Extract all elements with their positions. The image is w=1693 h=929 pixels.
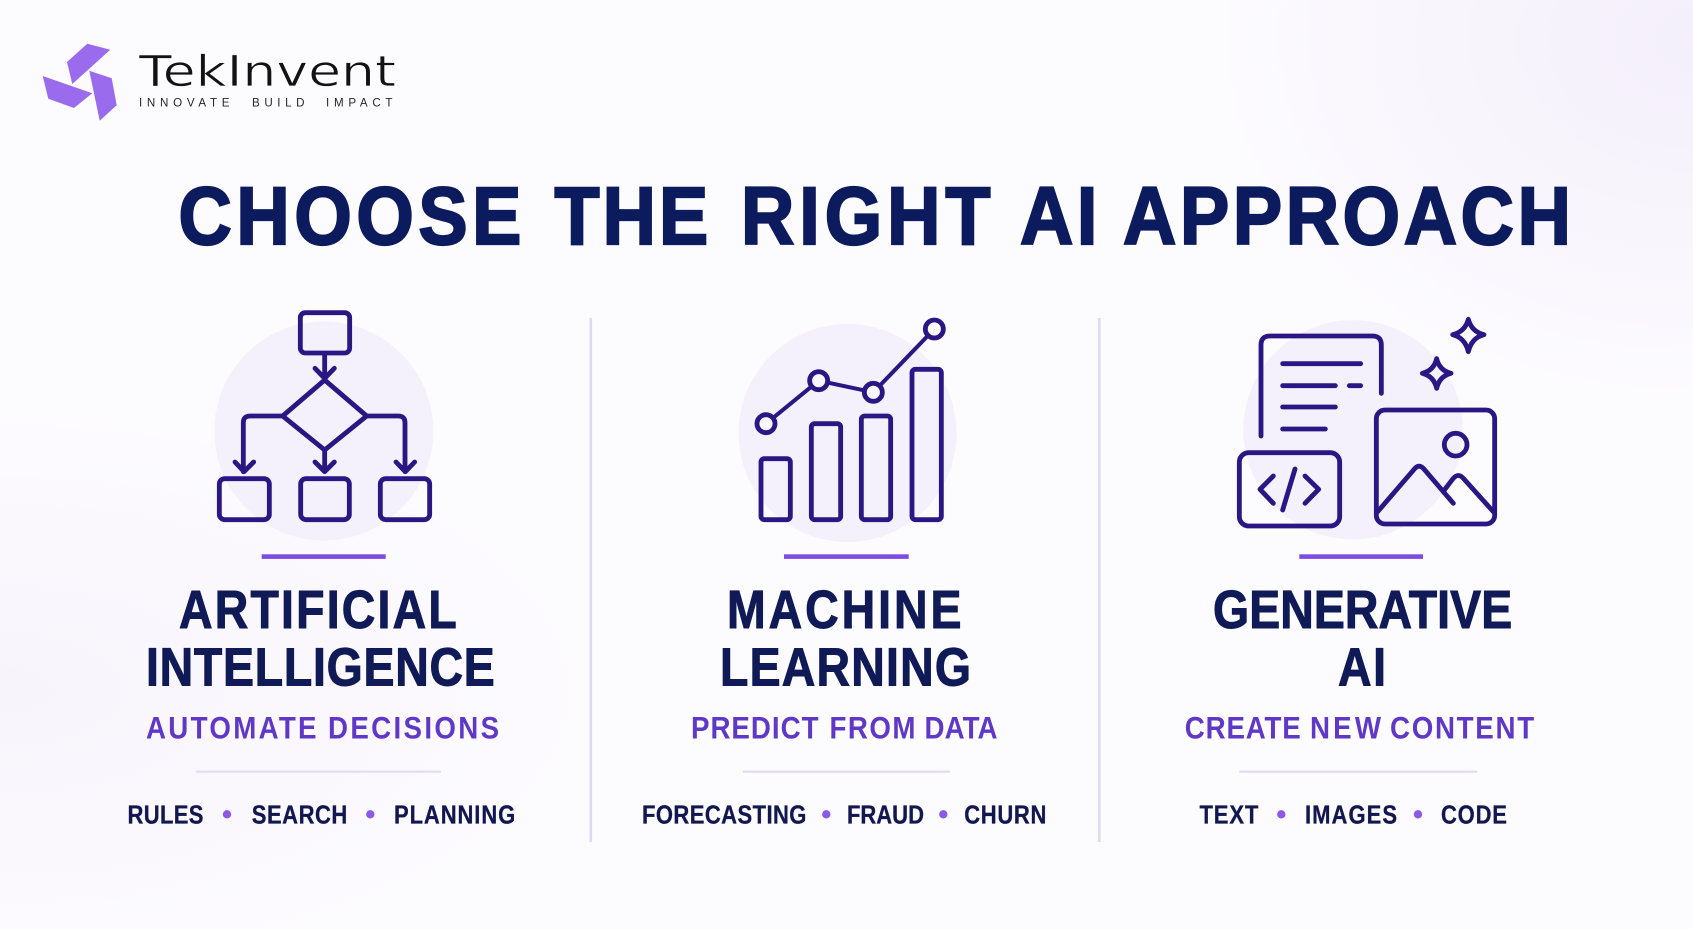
heading: AI: [1338, 636, 1386, 697]
heading: [146, 579, 495, 697]
accent bar: [784, 554, 909, 559]
title: RIGHT: [741, 169, 990, 262]
subheading: NEW: [1310, 711, 1381, 746]
column divider right: [1098, 318, 1101, 842]
heading: MACHINE: [727, 579, 961, 640]
subheading: AUTOMATE: [146, 711, 317, 746]
icon backdrop circle: [1243, 320, 1463, 539]
subheading: PREDICT: [691, 711, 819, 746]
list: text, images, code: IMAGES: [1305, 801, 1397, 830]
thin divider: [1239, 771, 1477, 773]
title: THE: [554, 169, 708, 262]
subheading: CONTENT: [1390, 711, 1534, 746]
icon: bar chart with trend line: [757, 320, 943, 520]
icon backdrop circle: [738, 324, 956, 542]
subheading: [691, 711, 998, 746]
panel: artificial intelligence: [128, 313, 515, 830]
heading: GENERATIVE: [1213, 579, 1512, 640]
thin divider: [196, 771, 441, 773]
thin divider: [743, 771, 950, 773]
list: forecasting, fraud, churn: FORECASTING: [642, 801, 806, 830]
heading: ARTIFICIAL: [179, 579, 457, 640]
list: rules, search, planning: [128, 801, 515, 830]
panel: generative AI: [1185, 319, 1534, 830]
icon: decision flowchart: [219, 313, 430, 520]
tagline: IMPACT: [326, 97, 392, 110]
heading: [720, 579, 971, 697]
list: text, images, code: CODE: [1441, 801, 1507, 830]
accent bar: [1299, 554, 1423, 559]
heading: LEARNING: [720, 636, 971, 697]
brand name: TekInvent: [138, 48, 396, 97]
panel: machine learning: [642, 320, 1046, 830]
subheading: [1185, 711, 1534, 746]
list: text, images, code: [1200, 801, 1507, 830]
title: AI: [1020, 169, 1097, 262]
title: APPROACH: [1123, 169, 1571, 262]
list: text, images, code: TEXT: [1200, 801, 1259, 830]
list: rules, search, planning: SEARCH: [252, 801, 347, 830]
heading: INTELLIGENCE: [146, 636, 495, 697]
heading: [1213, 579, 1512, 697]
logo: TekInvent: [43, 44, 396, 121]
subheading: DATA: [924, 711, 998, 746]
icon backdrop circle: [214, 322, 433, 540]
list: forecasting, fraud, churn: [642, 801, 1046, 830]
accent bar: [262, 554, 386, 559]
icon: pinwheel logo mark: [43, 44, 117, 121]
list: rules, search, planning: PLANNING: [394, 801, 515, 830]
title: CHOOSE: [178, 169, 521, 262]
tagline: INNOVATE: [139, 97, 230, 110]
tagline: [139, 97, 392, 110]
tagline: BUILD: [252, 97, 304, 110]
list: forecasting, fraud, churn: CHURN: [964, 801, 1046, 830]
column divider left: [590, 318, 592, 842]
subheading: DECISIONS: [328, 711, 499, 746]
list: forecasting, fraud, churn: FRAUD: [847, 801, 924, 830]
icon: document, code and image: [1239, 319, 1495, 526]
subheading: [146, 711, 499, 746]
title: [178, 169, 1571, 262]
list: rules, search, planning: RULES: [128, 801, 203, 830]
subheading: CREATE: [1185, 711, 1301, 746]
subheading: FROM: [830, 711, 915, 746]
